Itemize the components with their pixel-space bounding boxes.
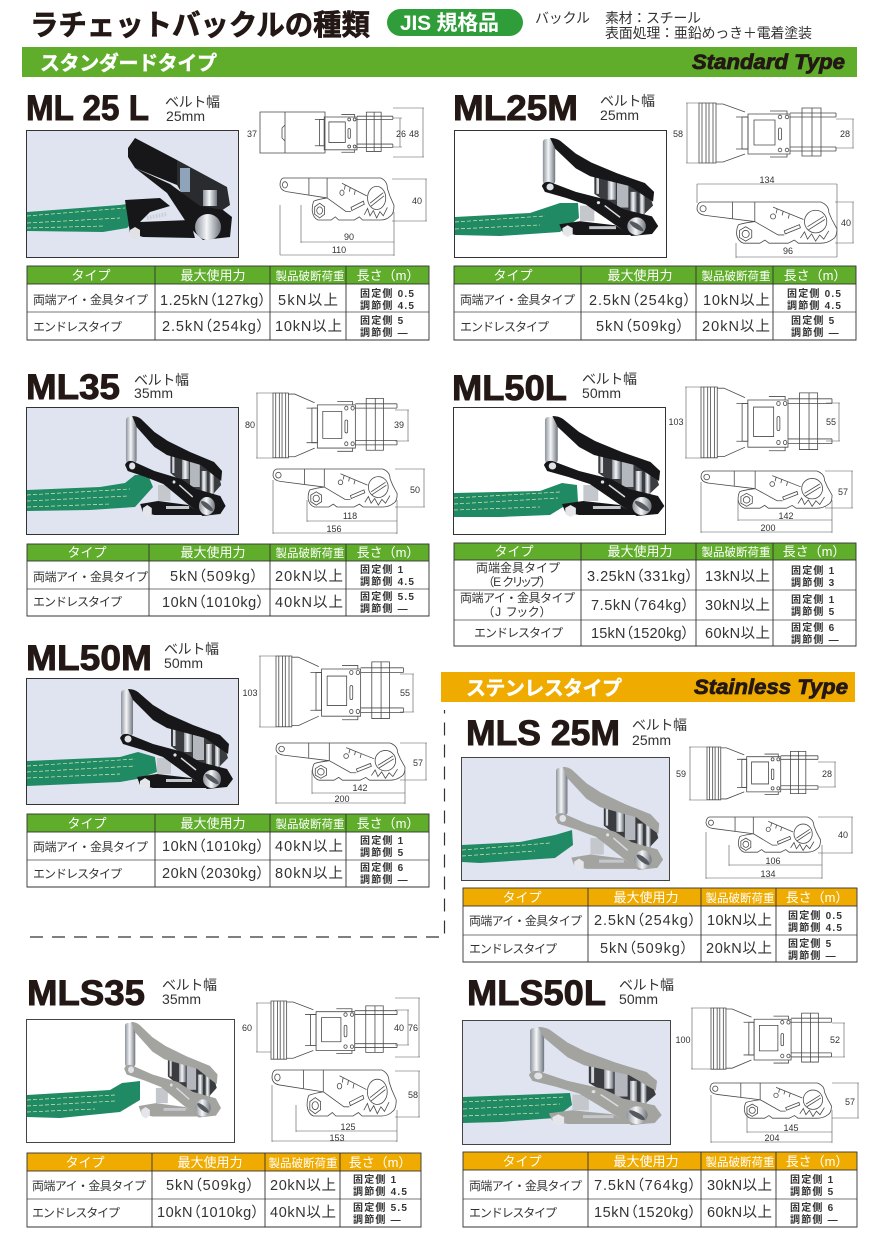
- belt width: ベルト幅: [165, 94, 220, 110]
- spec table: 10kN（1010kg）: [162, 594, 264, 611]
- spec table: 13kN以上: [705, 568, 770, 585]
- plan drawing: 60: [242, 1023, 252, 1033]
- side drawing: 57: [845, 1097, 855, 1107]
- spec table: 40kN以上: [275, 594, 343, 611]
- section header: stainless type: [441, 672, 855, 702]
- spec table: 固定側 6: [360, 861, 404, 874]
- belt width: ベルト幅: [600, 93, 655, 109]
- side drawing: [272, 1070, 420, 1143]
- spec table: 最大使用力: [613, 1154, 679, 1169]
- belt width: 25mm: [166, 108, 205, 124]
- side drawing: 145: [783, 1123, 799, 1133]
- belt width: ベルト幅: [582, 371, 637, 387]
- material note: バックル: [535, 10, 590, 26]
- plan drawing: [245, 393, 409, 458]
- photo: [462, 1020, 670, 1144]
- photo: [454, 130, 666, 258]
- plan drawing: [675, 1008, 845, 1069]
- plan drawing: 76: [408, 1023, 418, 1033]
- belt width: 35mm: [134, 385, 173, 401]
- side drawing: [280, 178, 427, 256]
- spec table: 3.25kN（331kg）: [587, 568, 693, 585]
- material note: 素材：スチール: [605, 10, 701, 26]
- side drawing: 40: [841, 218, 851, 228]
- spec table: （E クリップ）: [488, 575, 546, 589]
- plan drawing: 58: [673, 129, 683, 139]
- spec table: 長さ（m）: [783, 544, 845, 559]
- plan drawing: 100: [675, 1035, 691, 1045]
- JIS badge: [387, 9, 523, 36]
- plan drawing: [673, 103, 854, 163]
- spec table: エンドレスタイプ: [469, 1206, 557, 1220]
- side drawing: 142: [352, 783, 368, 793]
- side drawing: 156: [326, 524, 342, 534]
- side drawing: 96: [783, 246, 793, 256]
- spec table: 両端アイ・金具タイプ: [469, 914, 582, 928]
- spec table: 10kN以上: [275, 318, 342, 335]
- product: MLS25M: [462, 714, 857, 962]
- side drawing: 134: [759, 175, 775, 185]
- spec table: 固定側 1: [360, 834, 404, 847]
- belt width: [134, 372, 189, 401]
- photo: [26, 1020, 234, 1142]
- spec table: 固定側 1: [791, 564, 835, 577]
- spec table: 固定側 5: [791, 314, 835, 327]
- model name: MLS50L: [467, 974, 606, 1013]
- spec table: 固定側 0.5: [360, 287, 415, 300]
- belt width: ベルト幅: [164, 641, 219, 657]
- spec table: 固定側 1: [791, 593, 835, 606]
- spec table: 60kN以上: [705, 625, 770, 642]
- belt width: 50mm: [164, 655, 203, 671]
- spec table: 両端アイ・金具タイプ: [33, 293, 148, 307]
- spec table: 10kN以上: [707, 912, 772, 929]
- spec table: 固定側 1: [790, 1173, 834, 1186]
- spec table: 最大使用力: [613, 890, 679, 905]
- side drawing: [276, 743, 427, 804]
- plan drawing: [242, 656, 414, 727]
- spec table: [463, 1152, 857, 1227]
- spec table: 最大使用力: [180, 268, 246, 283]
- material note: [535, 10, 812, 41]
- belt width: ベルト幅: [619, 977, 674, 993]
- plan drawing: 48: [409, 129, 419, 139]
- photo: [26, 678, 238, 804]
- side drawing: 58: [408, 1090, 418, 1100]
- side drawing: [273, 469, 425, 534]
- spec table: タイプ: [494, 544, 534, 559]
- product: ML50M: [26, 639, 429, 887]
- spec table: 製品破断荷重: [706, 891, 774, 905]
- spec table: [27, 1153, 421, 1227]
- model name: ML50M: [26, 639, 152, 678]
- spec table: 5kN（509kg）: [170, 568, 258, 585]
- spec table: 10kN以上: [703, 292, 770, 309]
- plan drawing: 55: [826, 417, 836, 427]
- plan drawing: 40: [394, 1023, 404, 1033]
- section header: standard type: Standard Type: [692, 51, 845, 74]
- spec table: 60kN以上: [707, 1204, 772, 1221]
- belt width: [632, 717, 687, 748]
- spec table: 5kN（509kg）: [600, 940, 688, 957]
- spec table: タイプ: [502, 890, 542, 905]
- side drawing: 106: [765, 856, 781, 866]
- product: MLS35: [26, 974, 421, 1227]
- spec table: 最大使用力: [607, 268, 673, 283]
- plan drawing: [676, 747, 836, 800]
- photo: [462, 758, 670, 880]
- spec table: エンドレスタイプ: [33, 320, 122, 334]
- spec table: 調節側 5: [791, 605, 835, 618]
- spec table: タイプ: [71, 268, 111, 283]
- spec table: 調節側 ―: [791, 326, 840, 339]
- spec table: 製品破断荷重: [276, 546, 344, 560]
- spec table: 7.5kN（764kg）: [594, 1177, 696, 1194]
- belt width: 25mm: [600, 107, 639, 123]
- belt width: 50mm: [582, 385, 621, 401]
- spec table: 長さ（m）: [357, 545, 419, 560]
- spec table: 製品破断荷重: [276, 269, 344, 283]
- spec table: 5kN以上: [278, 292, 338, 309]
- spec table: 固定側 0.5: [788, 909, 843, 922]
- side drawing: 153: [329, 1133, 345, 1143]
- spec table: [27, 814, 429, 887]
- spec table: 最大使用力: [180, 545, 246, 560]
- spec table: 20kN以上: [702, 318, 770, 335]
- spec table: 5kN（509kg）: [596, 318, 684, 335]
- spec table: 両端アイ・金具タイプ: [469, 1179, 582, 1193]
- spec table: 10kN（1010kg）: [162, 838, 264, 855]
- spec table: 長さ（m）: [357, 268, 419, 283]
- spec table: 30kN以上: [705, 597, 770, 614]
- spec table: 最大使用力: [180, 816, 246, 831]
- plan drawing: [668, 387, 840, 458]
- spec table: [27, 266, 429, 340]
- spec table: 両端アイ・金具タイプ: [33, 840, 148, 854]
- spec table: 製品破断荷重: [702, 545, 770, 559]
- spec table: [454, 266, 856, 340]
- belt width: ベルト幅: [632, 717, 687, 733]
- spec table: （J フック）: [488, 605, 546, 619]
- spec table: 調節側 ―: [360, 873, 409, 886]
- spec table: 15kN（1520kg）: [594, 1204, 696, 1221]
- spec table: エンドレスタイプ: [32, 1206, 120, 1220]
- spec table: 固定側 6: [790, 1201, 834, 1214]
- spec table: 調節側 5: [790, 1185, 834, 1198]
- title: ラチェットバックルの種類: [30, 9, 370, 42]
- side drawing: 57: [838, 487, 848, 497]
- spec table: 固定側 6: [791, 621, 835, 634]
- product: ML25M: [453, 89, 856, 340]
- spec table: タイプ: [67, 545, 107, 560]
- plan drawing: 37: [247, 129, 257, 139]
- spec table: 固定側 5.5: [353, 1201, 408, 1214]
- spec table: 20kN（2030kg）: [162, 865, 264, 882]
- side drawing: 90: [344, 232, 354, 242]
- belt width: [619, 977, 674, 1007]
- spec table: エンドレスタイプ: [474, 626, 563, 640]
- belt width: [582, 371, 637, 401]
- spec table: 15kN（1520kg）: [591, 625, 689, 642]
- spec table: 7.5kN（764kg）: [591, 597, 689, 614]
- product: ML35: [26, 368, 429, 616]
- plan drawing: 26: [396, 129, 406, 139]
- spec table: 20kN以上: [270, 1177, 336, 1194]
- side drawing: [697, 175, 854, 258]
- spec table: 固定側 5: [788, 937, 832, 950]
- spec table: 両端アイ・金具タイプ: [460, 591, 575, 605]
- side drawing: 134: [760, 869, 776, 879]
- spec table: 固定側 5.5: [360, 590, 415, 603]
- side drawing: 142: [778, 511, 794, 521]
- belt width: [162, 977, 217, 1007]
- side drawing: 110: [332, 245, 346, 255]
- spec table: 両端アイ・金具タイプ: [460, 293, 575, 307]
- side drawing: 50: [410, 485, 420, 495]
- belt width: 35mm: [162, 991, 201, 1007]
- product: ML50L: [452, 369, 856, 646]
- plan drawing: 52: [830, 1035, 840, 1045]
- spec table: 5kN（509kg）: [166, 1177, 254, 1194]
- spec table: 調節側 ―: [790, 1213, 839, 1226]
- spec table: 両端アイ・金具タイプ: [32, 1179, 146, 1193]
- side drawing: [701, 471, 853, 533]
- section header: stainless type: ステンレスタイプ: [466, 677, 622, 700]
- spec table: タイプ: [502, 1154, 542, 1169]
- spec table: エンドレスタイプ: [33, 867, 122, 881]
- side drawing: 40: [412, 196, 422, 206]
- spec table: 20kN以上: [275, 568, 343, 585]
- spec table: 2.5kN（254kg）: [594, 912, 696, 929]
- spec table: タイプ: [65, 1155, 105, 1170]
- spec table: 80kN以上: [275, 865, 343, 882]
- spec table: 調節側 ―: [360, 326, 409, 339]
- belt width: 25mm: [632, 732, 671, 748]
- model name: MLS 25M: [466, 714, 620, 753]
- spec table: 2.5kN（254kg）: [162, 318, 264, 335]
- belt width: 50mm: [619, 991, 658, 1007]
- spec table: 2.5kN（254kg）: [589, 292, 691, 309]
- model name: ML 25 L: [26, 89, 149, 128]
- spec table: 40kN以上: [270, 1204, 336, 1221]
- model name: ML35: [26, 368, 120, 407]
- JIS badge: JIS 規格品: [400, 12, 499, 35]
- side drawing: 200: [334, 794, 350, 804]
- plan drawing: 55: [400, 688, 410, 698]
- spec table: 両端金具タイプ: [476, 561, 560, 575]
- spec table: 固定側 1: [353, 1173, 397, 1186]
- side drawing: 204: [764, 1133, 780, 1143]
- side drawing: [710, 1083, 859, 1143]
- belt width: ベルト幅: [162, 977, 217, 993]
- spec table: 長さ（m）: [357, 816, 419, 831]
- spec table: 両端アイ・金具タイプ: [33, 570, 148, 584]
- spec table: 固定側 1: [360, 563, 404, 576]
- spec table: 固定側 5: [360, 314, 404, 327]
- spec table: 製品破断荷重: [702, 269, 770, 283]
- product: ML25L: [26, 89, 429, 340]
- side drawing: 40: [838, 830, 848, 840]
- spec table: 長さ（m）: [784, 268, 846, 283]
- side drawing: 200: [760, 523, 776, 533]
- section header: stainless type: Stainless Type: [694, 676, 848, 699]
- material note: 表面処理：亜鉛めっき＋電着塗装: [605, 25, 812, 41]
- spec table: エンドレスタイプ: [33, 595, 122, 609]
- side drawing: [706, 817, 853, 879]
- plan drawing: 103: [668, 417, 684, 427]
- spec table: 調節側 ―: [360, 602, 409, 615]
- spec table: 調節側 5: [360, 846, 404, 859]
- spec table: 調節側 4.5: [360, 575, 415, 588]
- plan drawing: 59: [676, 769, 686, 779]
- side drawing: 118: [343, 511, 357, 521]
- photo: [26, 130, 238, 258]
- spec table: 1.25kN（127kg）: [160, 292, 266, 309]
- spec table: 調節側 ―: [791, 633, 840, 646]
- photo: [454, 408, 666, 534]
- spec table: 製品破断荷重: [276, 817, 344, 831]
- spec table: [463, 888, 857, 962]
- section header: standard type: [22, 47, 857, 77]
- belt width: [165, 94, 220, 124]
- spec table: [454, 543, 856, 646]
- plan drawing: [242, 998, 420, 1059]
- spec table: タイプ: [493, 268, 533, 283]
- side drawing: 57: [413, 758, 423, 768]
- spec table: 長さ（m）: [786, 890, 848, 905]
- plan drawing: [247, 108, 424, 157]
- plan drawing: 28: [822, 769, 832, 779]
- spec table: エンドレスタイプ: [460, 320, 549, 334]
- plan drawing: 39: [394, 420, 404, 430]
- spec table: 30kN以上: [707, 1177, 772, 1194]
- plan drawing: 80: [245, 420, 255, 430]
- spec table: 20kN以上: [706, 940, 772, 957]
- belt width: [164, 641, 219, 671]
- product: MLS50L: [462, 974, 859, 1227]
- spec table: 製品破断荷重: [268, 1156, 338, 1170]
- spec table: 最大使用力: [177, 1155, 243, 1170]
- spec table: 調節側 4.5: [788, 921, 843, 934]
- photo: [26, 408, 238, 534]
- model name: MLS35: [27, 974, 145, 1013]
- spec table: 調節側 4.5: [360, 299, 415, 312]
- spec table: 調節側 4.5: [787, 299, 842, 312]
- spec table: タイプ: [67, 816, 107, 831]
- model name: ML25M: [453, 89, 578, 128]
- spec table: 調節側 3: [791, 576, 835, 589]
- side drawing: 125: [340, 1122, 356, 1132]
- spec table: 製品破断荷重: [706, 1155, 774, 1169]
- spec table: [27, 544, 429, 616]
- spec table: 調節側 ―: [788, 949, 837, 962]
- spec table: 長さ（m）: [349, 1155, 411, 1170]
- plan drawing: 28: [840, 129, 850, 139]
- model name: ML50L: [452, 369, 567, 408]
- belt width: [600, 93, 655, 123]
- spec table: 固定側 0.5: [787, 287, 842, 300]
- spec table: 最大使用力: [607, 544, 673, 559]
- spec table: 長さ（m）: [786, 1154, 848, 1169]
- spec table: 40kN以上: [275, 838, 343, 855]
- spec table: 10kN（1010kg）: [157, 1204, 259, 1221]
- spec table: 調節側 4.5: [353, 1185, 408, 1198]
- section header: standard type: スタンダードタイプ: [40, 51, 217, 75]
- plan drawing: 103: [242, 688, 258, 698]
- spec table: 調節側 ―: [353, 1213, 402, 1226]
- spec table: エンドレスタイプ: [469, 942, 557, 956]
- belt width: ベルト幅: [134, 372, 189, 388]
